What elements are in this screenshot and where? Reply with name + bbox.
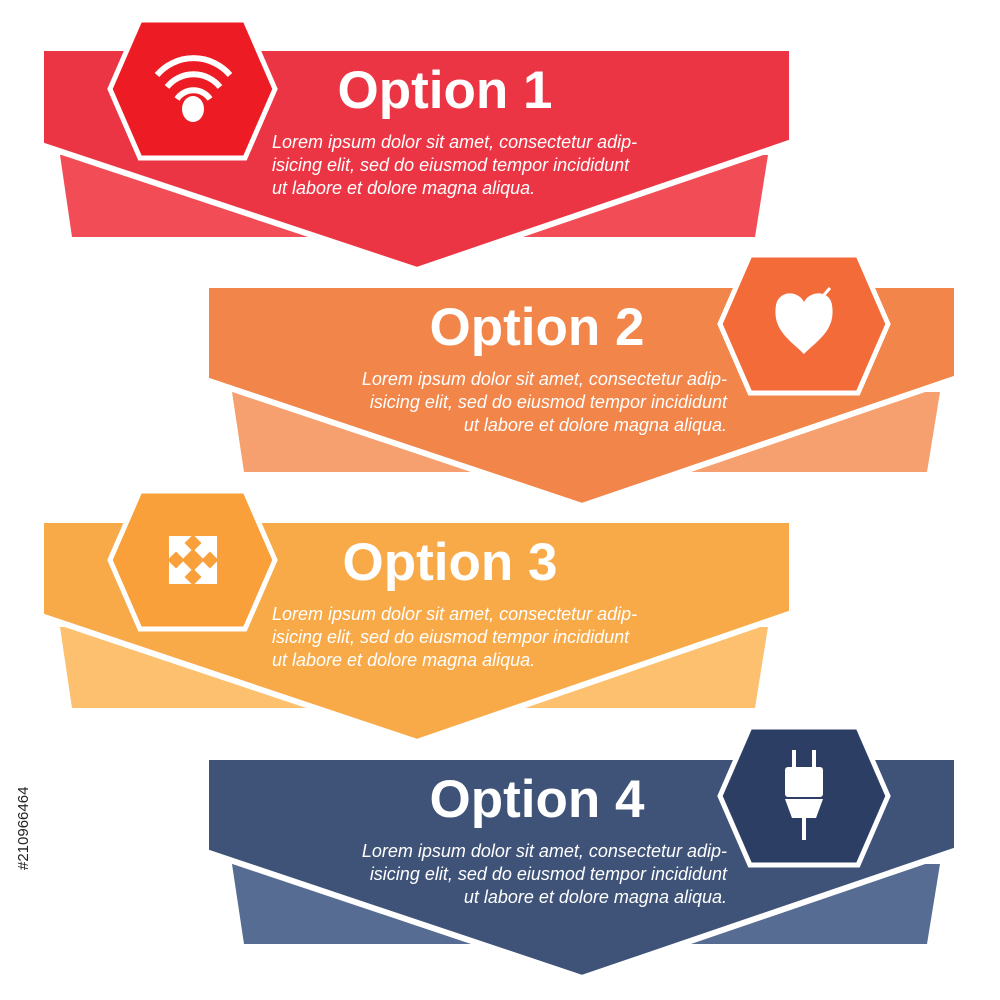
text block: option 2: ut labore et dolore magna aliqua. (464, 415, 727, 435)
text block: option 1: Lorem ipsum dolor sit amet, consectetur adip- (272, 132, 637, 152)
text block: option 4: isicing elit, sed do eiusmod tempor incididunt (370, 864, 728, 884)
panel: option 4 (206, 727, 957, 978)
panel: option 1 (41, 20, 792, 270)
side label: stock id: #210966464 (15, 787, 32, 870)
heading: option 2: Option 2 (430, 298, 644, 357)
text block: option 3: Lorem ipsum dolor sit amet, consectetur adip- (272, 604, 637, 624)
text block: option 2: Lorem ipsum dolor sit amet, consectetur adip- (362, 369, 727, 389)
heading: option 4: Option 4 (430, 770, 645, 829)
text block: option 4: Lorem ipsum dolor sit amet, consectetur adip- (362, 841, 727, 861)
text block: option 1: isicing elit, sed do eiusmod tempor incididunt (272, 155, 630, 175)
text block: option 3: isicing elit, sed do eiusmod tempor incididunt (272, 627, 630, 647)
icon: arrows hexagon (110, 491, 275, 629)
heading: option 3: Option 3 (343, 533, 557, 592)
text block: option 4: ut labore et dolore magna aliqua. (464, 887, 727, 907)
icon: wifi hexagon (110, 20, 275, 158)
panel: option 2 (206, 255, 957, 506)
panel: option 3 (41, 491, 792, 742)
icon: leaf hexagon (720, 255, 888, 393)
heading: option 1: Option 1 (338, 61, 552, 120)
text block: option 1: ut labore et dolore magna aliqua. (272, 178, 535, 198)
text block: option 3: ut labore et dolore magna aliqua. (272, 650, 535, 670)
icon: plug hexagon (720, 727, 888, 865)
text block: option 2: isicing elit, sed do eiusmod tempor incididunt (370, 392, 728, 412)
